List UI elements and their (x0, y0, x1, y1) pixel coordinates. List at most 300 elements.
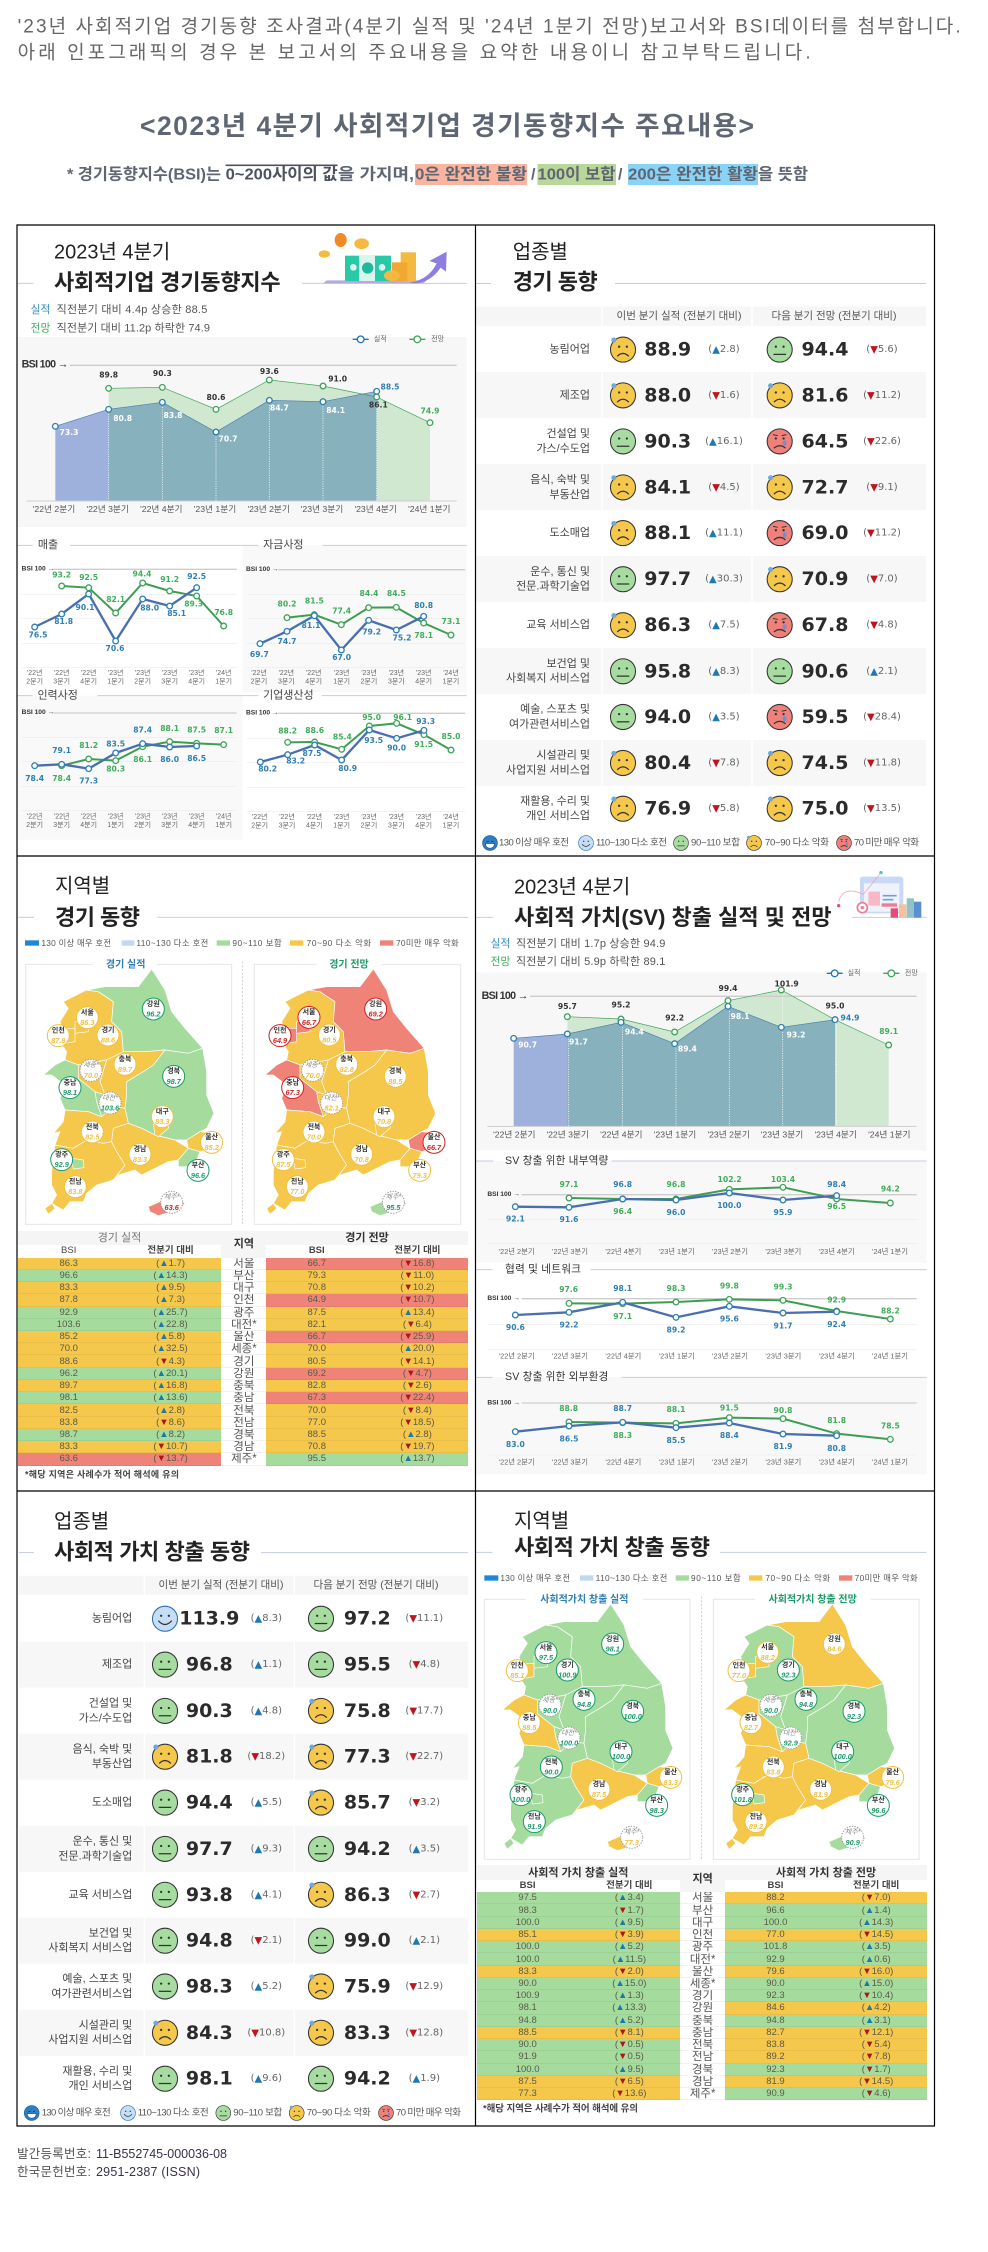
table: 경기 실적 / 전망: 서울 (233, 1258, 254, 1270)
map: 경기 실적: 제주* (164, 1193, 180, 1201)
map: 경기 실적: 대전* (102, 1094, 118, 1102)
table: 경기 실적 / 전망: 대구 (233, 1282, 254, 1294)
table: 사회적 가치 창출 실적 / 전망: (▲5.2) (615, 1941, 644, 1952)
table: 사회적 가치 창출 실적 / 전망: 강원 (692, 2002, 713, 2014)
table: 사회적 가치 창출 실적 / 전망: 81.9 (766, 2076, 785, 2087)
chart: 협력 및 네트워크: '24년 1분기 (872, 1351, 908, 1360)
row: 운수 통신: 94.2 (344, 1838, 391, 1860)
chart: 기업생산성: 1분기 (333, 820, 350, 829)
map: 경기 실적: 대구 (156, 1106, 169, 1115)
row: 도소매업: (▲5.5) (251, 1797, 282, 1808)
table: 경기 실적 / 전망: 98.7 (59, 1429, 78, 1440)
chart: SV 내부역량: SV 창출 위한 내부역량 (505, 1154, 609, 1167)
chart: 자금사정: 81.5 (305, 596, 324, 605)
row: 교육 서비스업: 67.8 (802, 614, 848, 636)
map: 경기 전망: 충남 (286, 1077, 300, 1086)
row: 시설관리: (▼7.8) (708, 758, 740, 768)
chart: 매출: '24년 (216, 668, 231, 677)
row: 건설업: 90.3 (186, 1700, 233, 1722)
row: 건설업: (▲4.8) (251, 1705, 282, 1716)
chart: 협력 및 네트워크: 협력 및 네트워크 (505, 1262, 581, 1275)
table: 사회적 가치 창출 실적 / 전망: 94.8 (518, 2015, 537, 2026)
face legend: 90~110 보합 (233, 2108, 283, 2118)
chart: 협력 및 네트워크: '22년 3분기 (552, 1351, 588, 1360)
map: 사회적가치 창출 전망: 100.0 (833, 1752, 852, 1761)
map: 사회적가치 창출 전망: 90.9 (846, 1838, 861, 1847)
summary text: 직전분기 대비 4.4p 상승한 88.5 (57, 303, 207, 316)
map: 사회적가치 창출 전망: 서울 (761, 1642, 775, 1651)
chart: 매출: 4분기 (188, 676, 205, 685)
map: 사회적가치 창출 전망: 광주 (736, 1784, 750, 1793)
table: 사회적 가치 창출 실적 / 전망: (▼2.0) (615, 1966, 644, 1977)
table: 경기 실적 / 전망: 강원 (233, 1368, 254, 1380)
row: 건설업: 건설업 및 (89, 1697, 132, 1710)
row: 도소매업 (550, 521, 901, 546)
chart: 기업생산성: 85.4 (333, 732, 352, 741)
map: 사회적가치 창출 전망: 세종* (763, 1696, 779, 1704)
map: 사회적가치 창출 전망: 84.6 (827, 1644, 842, 1653)
table: 경기 실적 / 전망: (▼8.4) (403, 1405, 432, 1416)
mini charts group (17, 538, 467, 840)
table: 사회적 가치 창출 실적 / 전망: 100.0 (516, 1954, 539, 1964)
table note: *해당 지역은 사례수가 적어 해석에 유의 (25, 1469, 179, 1480)
row: 예술 스포츠: (▼28.4) (863, 712, 901, 722)
summary text: 전망 (31, 322, 50, 334)
table: 사회적 가치 창출 실적 / 전망: (▼13.6) (612, 2088, 646, 2099)
area chart: BSI: 89.8 (99, 370, 118, 379)
map: 경기 전망: 경기 (323, 1025, 336, 1034)
intro text: '23년 사회적기업 경기동향 조사결과(4분기 실적 및 '24년 1분기 전망)보고서와 BSI데이터를 첨부합니다. (18, 16, 961, 38)
area chart: SV: '24년 1분기 (868, 1129, 911, 1139)
chart: 자금사정: 3분기 (278, 676, 295, 685)
table: 사회적 가치 창출 실적 / 전망: (▲3.5) (862, 1941, 891, 1952)
chart: 협력 및 네트워크 (487, 1262, 917, 1360)
row: 제조업 (560, 383, 901, 408)
chart: 매출: 매출 (38, 538, 58, 551)
table: 사회적 가치 창출 실적 / 전망: (▲15.0) (612, 1978, 646, 1989)
map legend: 110~130 다소 호전 (136, 938, 208, 948)
table: 경기 실적 / 전망 (18, 1231, 468, 1466)
row: 보건업: 보건업 및 (89, 1926, 132, 1939)
table: 경기 실적 / 전망: 96.6 (59, 1270, 78, 1281)
chart: 자금사정: 자금사정 (263, 538, 304, 551)
chart: 협력 및 네트워크: 97.1 (613, 1312, 632, 1321)
row: 농림어업: 97.2 (344, 1608, 391, 1630)
area chart: BSI: 80.6 (207, 393, 225, 402)
row: 건설업: 64.5 (802, 430, 848, 452)
chart: 협력 및 네트워크: '22년 2분기 (499, 1351, 535, 1360)
chart: 협력 및 네트워크: 98.3 (667, 1284, 685, 1293)
BSI note with highlights: / (618, 166, 623, 184)
table: 사회적 가치 창출 실적 / 전망: 지역 (692, 1873, 713, 1885)
column headers: 다음 분기 전망 (전분기 대비) (772, 310, 896, 322)
chart: 기업생산성: '22년 (252, 812, 267, 821)
heading (55, 875, 140, 930)
chart: SV 외부환경: 78.5 (881, 1421, 900, 1430)
table: 경기 실적 / 전망: 경기 (233, 1356, 254, 1368)
table: 경기 실적 / 전망: 70.0 (59, 1343, 78, 1354)
row: 농림어업: 88.9 (644, 339, 691, 361)
chart: 자금사정 (246, 538, 465, 685)
face legend: 130 이상 매우 호전 (499, 838, 569, 848)
area chart: SV: 89.4 (678, 1044, 697, 1053)
row: 예술 스포츠: (▲5.2) (251, 1981, 282, 1992)
table: 경기 실적 / 전망: (▼25.9) (400, 1331, 434, 1342)
map: 경기 전망: 70.8 (377, 1117, 392, 1126)
map: 사회적가치 창출 실적: 제주* (624, 1828, 640, 1836)
row: 보건업 (48, 1926, 440, 1954)
chart: 자금사정: 4분기 (415, 676, 432, 685)
chart: 자금사정: 84.5 (387, 589, 406, 598)
row: 교육 서비스업: 교육 서비스업 (69, 1888, 132, 1901)
map: 사회적가치 창출 전망: 79.6 (886, 1778, 901, 1787)
map: 경기 실적: 전북 (86, 1122, 99, 1131)
map: 경기 실적: 92.9 (55, 1160, 70, 1169)
row: 제조업: 제조업 (560, 388, 590, 401)
chart: 인력사정: BSI 100 → (22, 709, 54, 716)
table: 사회적 가치 창출 실적 / 전망: 92.9 (766, 1954, 785, 1964)
table: 사회적 가치 창출 실적 / 전망: 충남 (692, 2027, 713, 2039)
row: 제조업: 95.5 (344, 1654, 391, 1676)
map: 사회적가치 창출 전망: 충북 (800, 1689, 813, 1698)
map: 경기 전망 (254, 957, 461, 1224)
chart: SV 내부역량: 97.1 (560, 1180, 578, 1189)
chart: 기업생산성: '23년 (334, 812, 349, 821)
row: 운수 통신: 전문.과학기술업 (58, 1849, 132, 1862)
map: 사회적가치 창출 전망: 92.3 (781, 1670, 795, 1679)
row: 도소매업: 69.0 (802, 522, 848, 544)
map: 사회적가치 창출 전망: 94.8 (799, 1700, 814, 1709)
chart: SV 내부역량: '23년 1분기 (659, 1247, 695, 1256)
heading: 사회적 가치(SV) 창출 실적 및 전망 (514, 905, 832, 930)
row: 교육 서비스업: (▲4.1) (251, 1889, 282, 1900)
map: 사회적가치 창출 실적: 대구 (615, 1741, 628, 1750)
table: 사회적 가치 창출 실적 / 전망: 87.5 (518, 2076, 537, 2087)
area chart: BSI: 70.7 (219, 434, 237, 443)
chart: 기업생산성: 1분기 (443, 820, 459, 829)
chart: SV 외부환경: 80.8 (827, 1444, 846, 1453)
map: 사회적가치 창출 실적: 울산 (664, 1767, 678, 1776)
chart: 자금사정: 80.8 (414, 601, 433, 610)
column headers: 이번 분기 실적 (전분기 대비) (159, 1579, 283, 1591)
table: 사회적 가치 창출 실적 / 전망: 대구 (692, 1917, 713, 1929)
table: 사회적 가치 창출 실적 / 전망: 83.3 (518, 1966, 537, 1977)
heading: 2023년 4분기 (514, 876, 630, 899)
chart: 자금사정: 84.4 (360, 589, 378, 598)
table: 경기 실적 / 전망: 66.7 (307, 1331, 326, 1342)
chart: 협력 및 네트워크: 89.2 (667, 1325, 685, 1334)
map: 사회적가치 창출 전망: 경기 (782, 1660, 795, 1669)
map: 경기 실적: 82.5 (85, 1132, 100, 1141)
table: 사회적 가치 창출 실적 / 전망: 울산 (692, 1966, 713, 1978)
row: 운수 통신: (▲3.5) (409, 1843, 440, 1854)
row: 예술 스포츠: 75.9 (344, 1976, 391, 1998)
chart: 인력사정: 81.2 (79, 741, 98, 750)
row: 운수 통신: (▲9.3) (251, 1843, 282, 1854)
area chart: SV: '23년 4분기 (814, 1129, 857, 1139)
map: 사회적가치 창출 실적: 98.1 (606, 1644, 620, 1653)
area chart: SV: 101.9 (775, 979, 799, 988)
chart legend: 전망 (905, 968, 918, 977)
panel: 지역별 사회적 가치 창출 동향 (476, 1510, 927, 1859)
footer publication numbers: 11-B552745-000036-08 (96, 2147, 227, 2161)
map: 경기 전망: 88.5 (388, 1077, 403, 1086)
row: 재활용: 개인 서비스업 (69, 2079, 132, 2092)
table: 사회적 가치 창출 실적 / 전망 (477, 1865, 927, 2100)
table: 경기 실적 / 전망: 충북 (233, 1380, 254, 1392)
chart: 기업생산성: 88.2 (278, 726, 297, 735)
row: 예술 스포츠: 94.0 (644, 706, 691, 728)
map: 사회적가치 창출 실적: 강원 (606, 1634, 619, 1643)
area chart: BSI: 93.6 (260, 367, 279, 376)
footer publication numbers: 발간등록번호: (17, 2147, 91, 2161)
table: 사회적 가치 창출 실적 / 전망: (▲15.0) (859, 1978, 893, 1989)
row: 재활용: 76.9 (644, 798, 691, 820)
area chart: SV: '23년 2분기 (707, 1129, 750, 1139)
table: 경기 실적 / 전망: 63.6 (59, 1453, 78, 1464)
panel: 업종별 경기 동향 (476, 241, 926, 850)
heading (513, 241, 598, 294)
map: 경기 실적: 충남 (64, 1077, 77, 1086)
row: 시설관리: 시설관리 및 (79, 2018, 132, 2031)
row: 음식 숙박: 81.8 (186, 1746, 233, 1768)
row: 운수 통신: 70.9 (802, 568, 848, 590)
map: 사회적가치 창출 실적: 87.5 (592, 1790, 607, 1799)
map legend: 110~130 다소 호전 (596, 1573, 667, 1583)
chart legend: 실적 (374, 334, 387, 343)
map: 경기 전망: 전북 (308, 1122, 321, 1131)
chart: SV 외부환경: BSI 100 → (487, 1399, 520, 1406)
table: 경기 실적 / 전망: (▲32.5) (153, 1343, 188, 1354)
chart: 기업생산성: 4분기 (415, 820, 432, 829)
map: 사회적가치 창출 전망 (713, 1592, 919, 1859)
table: 사회적 가치 창출 실적 / 전망: (▼3.9) (615, 1929, 644, 1940)
chart: 인력사정: 77.3 (79, 776, 98, 785)
chart: 매출 (22, 538, 237, 685)
chart legend (827, 968, 918, 977)
chart: 기업생산성: 95.0 (362, 713, 381, 722)
area chart: BSI: 84.1 (326, 406, 345, 415)
area chart: BSI: 73.3 (60, 428, 78, 437)
heading: 사회적 가치 창출 동향 (514, 1535, 710, 1560)
table: 사회적 가치 창출 실적 / 전망: BSI (768, 1880, 783, 1891)
area chart: BSI: 80.8 (113, 414, 132, 423)
area chart: BSI: '23년 1분기 (194, 504, 236, 514)
chart: 기업생산성: 93.3 (416, 717, 435, 726)
face legend: 110~130 다소 호전 (596, 838, 667, 848)
chart: SV 내부역량: BSI 100 → (487, 1191, 520, 1198)
row: 농림어업: (▼5.6) (866, 344, 898, 355)
row: 보건업: (▲8.3) (708, 666, 740, 677)
row: 제조업: 96.8 (186, 1654, 233, 1676)
row: 도소매업: (▲11.1) (705, 528, 743, 539)
row: 시설관리: 74.5 (802, 752, 848, 774)
area chart: BSI: 90.3 (153, 369, 172, 378)
table: 경기 실적 / 전망: 인천 (233, 1294, 254, 1306)
face legend: 110~130 다소 호전 (138, 2108, 209, 2118)
table: 경기 실적 / 전망: 전분기 대비 (394, 1245, 441, 1256)
chart: 인력사정: '22년 (54, 811, 69, 820)
heading (54, 1510, 250, 1564)
chart: 자금사정: 4분기 (305, 676, 322, 685)
map: 사회적가치 창출 실적: 광주 (515, 1784, 528, 1793)
table: 사회적 가치 창출 실적 / 전망: 89.2 (766, 2051, 785, 2062)
table: 경기 실적 / 전망: 제주* (231, 1453, 257, 1465)
overview chart group (17, 233, 467, 527)
heading: 지역별 (514, 1510, 569, 1533)
map legend: 70~90 다소 악화 (765, 1573, 830, 1583)
row: 교육 서비스업: 86.3 (644, 614, 691, 636)
chart: 협력 및 네트워크: '23년 3분기 (765, 1351, 801, 1360)
area chart: BSI: BSI 100 → (22, 359, 68, 371)
map: 사회적가치 창출 전망: 부산 (872, 1795, 885, 1804)
row: 시설관리: (▼12.8) (405, 2027, 443, 2038)
map: 경기 실적: 98.1 (63, 1088, 77, 1097)
map: 사회적가치 창출 전망: 82.7 (744, 1723, 759, 1732)
row: 예술 스포츠 (51, 1972, 443, 2000)
chart: 인력사정: 2분기 (26, 820, 43, 829)
table: 사회적 가치 창출 실적 / 전망: (▼1.7) (862, 2064, 891, 2075)
chart: 매출: '23년 (108, 668, 123, 677)
chart: 기업생산성: '22년 (307, 812, 322, 821)
panel: 사회적 가치 실적 및 전망 (476, 871, 927, 1151)
table: 사회적 가치 창출 실적 / 전망: 부산 (692, 1905, 713, 1917)
table: 경기 실적 / 전망: 83.8 (59, 1417, 78, 1428)
table: 경기 실적 / 전망: (▼8.6) (156, 1417, 185, 1428)
table: 사회적 가치 창출 실적 / 전망: (▼0.5) (615, 2039, 644, 2050)
chart: 인력사정: 88.1 (160, 724, 179, 733)
row: 보건업: 보건업 및 (546, 657, 590, 670)
table: 사회적 가치 창출 실적 / 전망: 98.1 (518, 2002, 537, 2013)
row: 시설관리: 83.3 (344, 2022, 391, 2044)
row: 도소매업: (▼3.2) (409, 1797, 440, 1808)
map: 경기 전망: 서울 (303, 1007, 316, 1016)
chart: 기업생산성: 80.9 (338, 764, 357, 773)
SV sub charts group (476, 1154, 927, 1474)
chart: SV 내부역량: '23년 4분기 (819, 1247, 855, 1256)
chart: SV 내부역량: 96.4 (613, 1207, 632, 1216)
map: 경기 실적: 경기 (102, 1025, 114, 1034)
face legend: 70 미만 매우 악화 (854, 836, 919, 848)
table: 경기 실적 / 전망: BSI (309, 1245, 325, 1256)
table: 사회적 가치 창출 실적 / 전망: 96.6 (766, 1905, 785, 1916)
chart: SV 내부역량: 100.0 (717, 1201, 741, 1210)
row: 시설관리: 사업지원 서비스업 (48, 2033, 132, 2046)
row: 보건업: 94.8 (186, 1930, 233, 1952)
chart: SV 내부역량: 94.2 (881, 1185, 900, 1194)
chart: 매출: 90.1 (76, 603, 94, 612)
table: 사회적 가치 창출 실적 / 전망: (▼0.5) (615, 2051, 644, 2062)
table: 경기 실적 / 전망: 70.8 (307, 1282, 326, 1293)
table: 사회적 가치 창출 실적 / 전망: 92.3 (766, 1990, 785, 2001)
row: 보건업: (▲2.1) (866, 666, 898, 677)
chart: 매출: 76.5 (29, 630, 47, 639)
chart: 자금사정: 69.7 (250, 650, 269, 659)
area chart: SV: 94.4 (625, 1027, 644, 1036)
chart: 자금사정: '23년 (334, 668, 349, 677)
summary text: 직전분기 대비 1.7p 상승한 94.9 (516, 937, 665, 950)
panel: 지역별 경기 동향 (18, 875, 468, 1480)
row: 재활용: 재활용, 수리 및 (520, 793, 590, 807)
row: 음식 숙박: 72.7 (802, 476, 848, 498)
row: 보건업: (▲2.1) (409, 1935, 440, 1946)
chart: 자금사정: 81.1 (302, 621, 320, 630)
chart: 매출: '23년 (162, 668, 177, 677)
chart: SV 내부역량: '23년 3분기 (765, 1247, 801, 1256)
table: 사회적 가치 창출 실적 / 전망: 서울 (692, 1892, 713, 1904)
table: 사회적 가치 창출 실적 / 전망: (▲3.4) (615, 1892, 644, 1903)
table: 경기 실적 / 전망: (▲2.8) (403, 1429, 432, 1440)
chart: 협력 및 네트워크: 95.6 (720, 1314, 739, 1323)
row: 농림어업: 94.4 (802, 339, 848, 361)
chart: 매출: 2분기 (134, 676, 151, 685)
chart: 자금사정: 2분기 (251, 676, 267, 685)
table: 경기 실적 / 전망: (▲13.4) (400, 1307, 434, 1318)
map: 사회적가치 창출 전망: 83.8 (766, 1767, 781, 1776)
row: 건설업: (▼17.7) (405, 1705, 443, 1716)
chart: 기업생산성: BSI 100 → (246, 709, 279, 716)
chart: 협력 및 네트워크: 99.3 (774, 1282, 792, 1291)
map: 사회적가치 창출 전망: 101.8 (733, 1795, 753, 1804)
table: 경기 실적 / 전망: 83.3 (59, 1282, 78, 1293)
chart: SV 외부환경: '23년 1분기 (659, 1457, 695, 1466)
chart: SV 외부환경: '23년 4분기 (819, 1457, 855, 1466)
map: 사회적가치 창출 전망: 대구 (836, 1741, 850, 1750)
chart: 자금사정: 75.2 (393, 633, 411, 642)
area chart: SV: 90.7 (518, 1040, 537, 1049)
row: 보건업: 95.8 (644, 660, 691, 682)
map: 사회적가치 창출 실적: 94.8 (577, 1700, 592, 1709)
chart legend: 실적 (848, 968, 860, 977)
chart: 기업생산성: 3분기 (388, 820, 405, 829)
row: 농림어업: 113.9 (179, 1608, 239, 1630)
area chart: BSI (17, 334, 467, 527)
chart: 기업생산성: '23년 (416, 812, 431, 821)
map: 경기 실적: 98.7 (167, 1077, 182, 1086)
row: 음식 숙박: 77.3 (344, 1746, 391, 1768)
map: 경기 실적: 96.2 (146, 1009, 160, 1018)
map legend: 90~110 보합 (232, 938, 282, 948)
table: 사회적 가치 창출 실적 / 전망: 100.0 (516, 2064, 539, 2075)
chart: SV 내부역량: 96.8 (613, 1180, 632, 1189)
row: 건설업 (536, 427, 901, 455)
table: 경기 실적 / 전망: (▼10.2) (400, 1282, 434, 1293)
column headers: 이번 분기 실적 (전분기 대비) (617, 310, 741, 322)
map: 경기 전망: 67.3 (286, 1088, 300, 1097)
chart: 자금사정: 79.2 (362, 627, 381, 636)
heading: 지역별 (55, 875, 110, 898)
table: 경기 실적 / 전망: 87.8 (59, 1294, 78, 1305)
area chart: SV: BSI 100 → (482, 990, 528, 1002)
map: 사회적가치 창출 전망: 경남 (814, 1779, 828, 1788)
table: 사회적 가치 창출 실적 / 전망: 94.8 (766, 2015, 785, 2026)
map: 사회적가치 창출 실적: 경기 (561, 1660, 574, 1669)
row: 음식 숙박: 음식, 숙박 및 (73, 1742, 132, 1755)
chart: 매출: 1분기 (107, 676, 124, 685)
table: 경기 실적 / 전망: 대전* (231, 1319, 257, 1331)
chart: SV 외부환경: 81.9 (774, 1442, 792, 1451)
chart: 인력사정: 인력사정 (37, 689, 78, 702)
chart: 매출: '23년 (135, 668, 150, 677)
map: 경기 전망: 77.0 (290, 1187, 304, 1196)
map: 사회적가치 창출 전망: 전남 (750, 1811, 763, 1820)
area chart: SV: '22년 3분기 (546, 1129, 589, 1139)
heading: 경기 동향 (55, 905, 140, 930)
row: 음식 숙박 (73, 1742, 443, 1770)
chart: 매출: '23년 (189, 668, 204, 677)
row: 음식 숙박: 음식, 숙박 및 (530, 473, 590, 486)
chart: 협력 및 네트워크: 88.2 (881, 1306, 900, 1315)
